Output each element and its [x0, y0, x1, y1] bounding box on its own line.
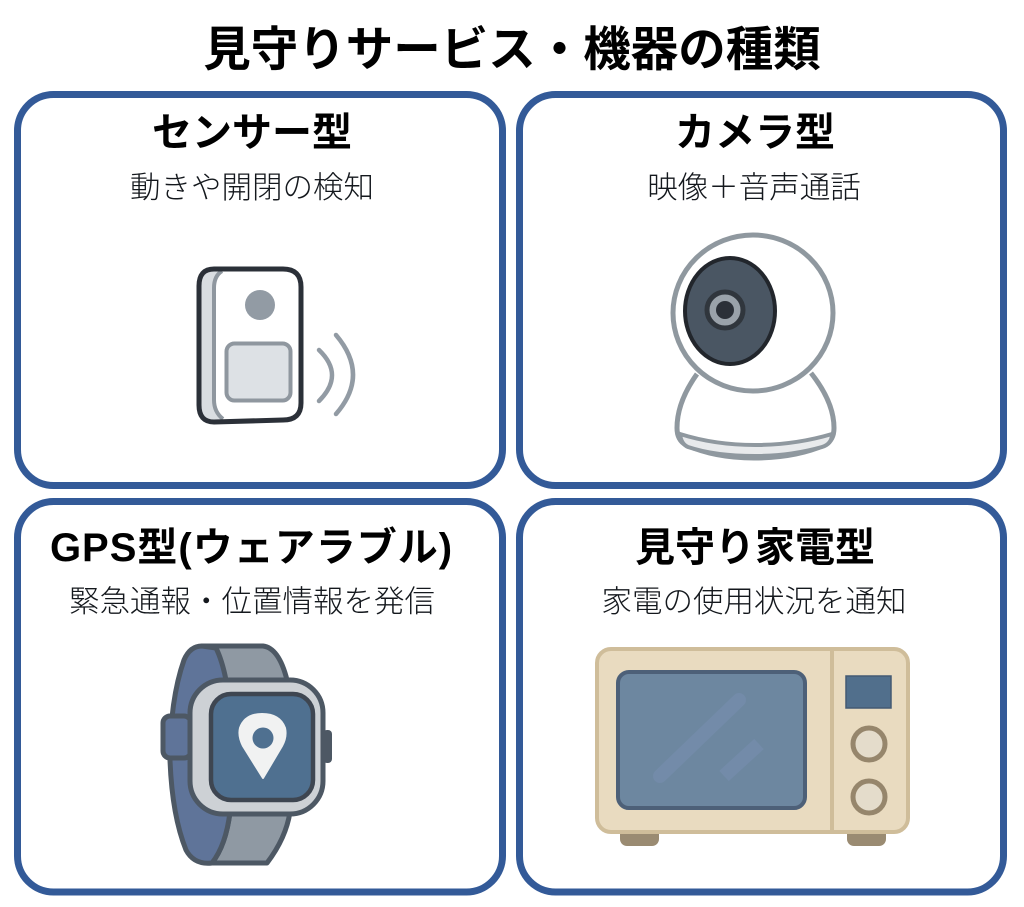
heading: GPS wearable type: GPS型(ウェアラブル): [50, 526, 453, 570]
heading: camera type: カメラ型: [675, 111, 835, 155]
panel: monitoring appliance type: [520, 502, 1004, 892]
heading: sensor type: センサー型: [152, 111, 352, 155]
icon: dome camera: [673, 235, 834, 458]
panel: sensor type: [18, 94, 502, 486]
icon: smartwatch with location pin: [163, 646, 332, 863]
icon: motion sensor: [199, 269, 353, 422]
panel: GPS wearable type: [18, 502, 502, 892]
description: sensor type: 動きや開閉の検知: [130, 163, 374, 207]
icon: microwave oven: [597, 649, 908, 846]
description: GPS wearable type: 緊急通報・位置情報を発信: [69, 577, 435, 621]
description: monitoring appliance type: 家電の使用状況を通知: [602, 577, 906, 621]
title: 見守りサービス・機器の種類: [203, 24, 821, 77]
panel: camera type: [520, 94, 1004, 486]
heading: monitoring appliance type: 見守り家電型: [635, 526, 875, 570]
description: camera type: 映像＋音声通話: [647, 163, 861, 207]
